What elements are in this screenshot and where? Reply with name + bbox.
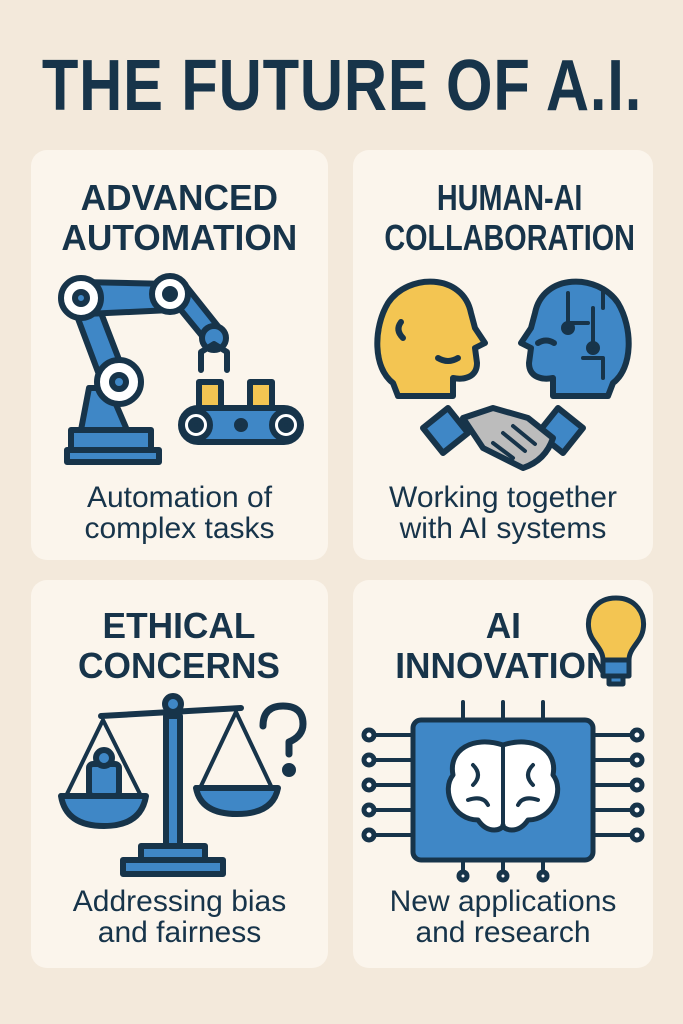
heading: AI <box>485 605 521 646</box>
title: THE FUTURE OF A.I. <box>41 46 642 126</box>
description: and fairness <box>98 916 261 949</box>
description: and research <box>415 916 591 949</box>
heading: AUTOMATION <box>62 217 297 258</box>
panel: ai innovation <box>353 580 653 968</box>
heading: ETHICAL <box>103 605 256 646</box>
heading <box>62 177 297 258</box>
heading: INNOVATION <box>395 645 611 686</box>
heading <box>395 605 611 686</box>
heading: CONCERNS <box>79 645 280 686</box>
icon: heads and handshake <box>374 278 632 471</box>
icon: robot arm <box>58 273 304 465</box>
heading: COLLABORATION <box>384 217 635 258</box>
description: complex tasks <box>84 512 275 545</box>
description: Automation of <box>87 481 272 514</box>
icon: chip with brain <box>362 700 644 882</box>
panel: ethical concerns <box>31 580 328 968</box>
heading: HUMAN-AI <box>437 177 582 218</box>
heading <box>384 177 635 258</box>
heading: ADVANCED <box>81 177 278 218</box>
description <box>390 885 616 949</box>
icon: scales <box>58 693 306 877</box>
panel: human-ai collaboration <box>353 150 653 560</box>
panel: advanced automation <box>31 150 328 560</box>
description <box>84 481 275 545</box>
description: with AI systems <box>400 512 606 545</box>
description <box>72 885 286 949</box>
description: New applications <box>390 885 616 918</box>
description <box>389 481 617 545</box>
description: Working together <box>389 481 617 514</box>
description: Addressing bias <box>73 885 286 918</box>
icon: lightbulb <box>586 596 646 686</box>
heading <box>79 605 280 686</box>
